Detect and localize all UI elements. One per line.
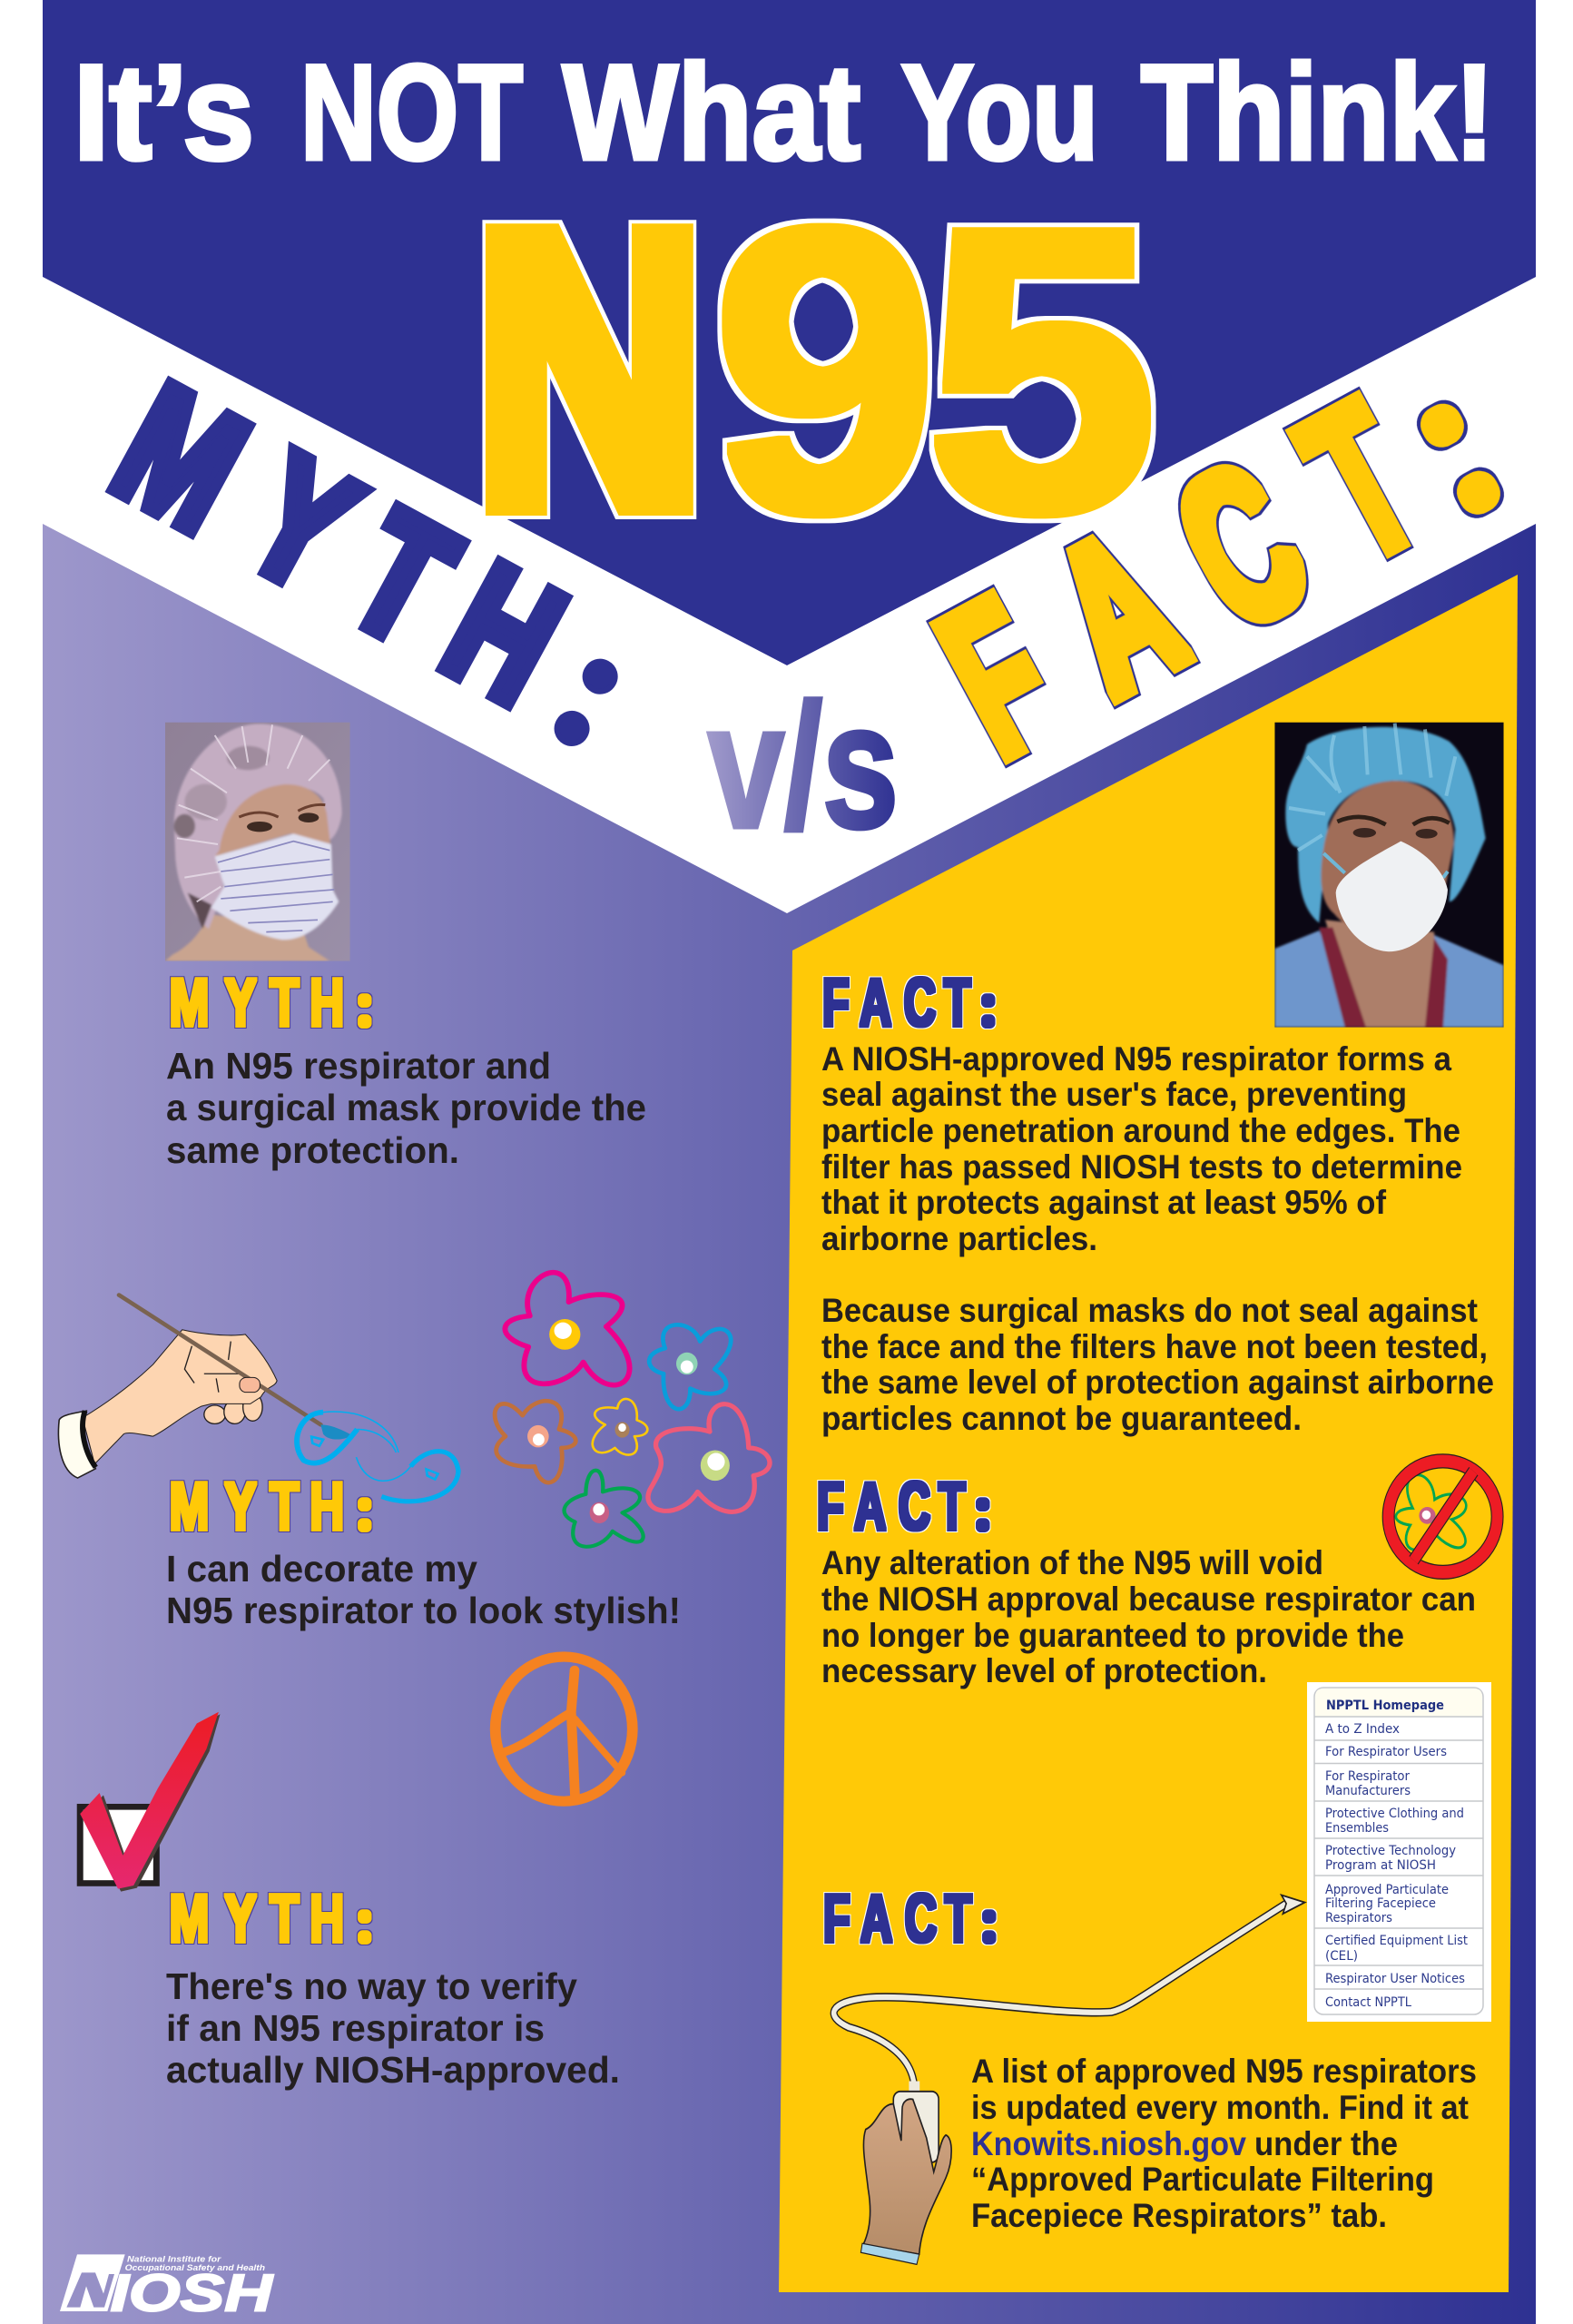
fact text: seal against the user's face, preventing: [821, 1076, 1407, 1113]
web menu screenshot: [1307, 1682, 1491, 2022]
myth text: actually NIOSH-approved.: [166, 2049, 620, 2091]
myth text: I can decorate my: [166, 1548, 477, 1590]
web menu screenshot: For Respirator Users: [1325, 1745, 1447, 1759]
myth text: [166, 1045, 646, 1171]
title: It’s: [74, 36, 254, 188]
logo: NIOSH: National Institute for: [127, 2255, 221, 2264]
panel: fact yellow: [779, 575, 1518, 2292]
myth text: same protection.: [166, 1129, 459, 1171]
heading: N95: 5: [927, 146, 1157, 596]
fact text: under the: [1254, 2125, 1398, 2162]
fact text: filter has passed NIOSH tests to determine: [821, 1148, 1462, 1186]
logo: NIOSH: IOSH: [111, 2264, 274, 2322]
logo: NIOSH: Occupational Safety and Health: [125, 2263, 266, 2272]
fact 1: [821, 966, 1494, 1437]
web menu screenshot: A to Z Index: [1325, 1722, 1400, 1737]
title: [74, 36, 1494, 188]
fact text: the NIOSH approval because respirator can: [821, 1581, 1476, 1618]
title: You: [901, 36, 1098, 188]
myth text: if an N95 respirator is: [166, 2007, 545, 2049]
myth heading: :: [354, 1884, 376, 1956]
myth 2: [166, 1468, 681, 1631]
title: Think!: [1141, 36, 1494, 188]
fact text: Because surgical masks do not seal against: [821, 1292, 1478, 1329]
fact text: the same level of protection against airborne: [821, 1364, 1494, 1401]
title: What: [563, 36, 860, 188]
fact text: [821, 1040, 1494, 1437]
myth 3: [166, 1880, 620, 2091]
title: NOT: [300, 36, 523, 188]
heading: FACT diagonal: FACT: [907, 357, 1452, 802]
fact text: [821, 1544, 1476, 1689]
web menu screenshot: For Respirator: [1325, 1769, 1410, 1784]
icon: prohibited flower: [1389, 1461, 1498, 1572]
myth text: a surgical mask provide the: [166, 1087, 646, 1128]
fact text: A list of approved N95 respirators: [971, 2053, 1477, 2090]
web menu screenshot: (CEL): [1325, 1949, 1358, 1964]
web menu screenshot: Approved Particulate: [1325, 1883, 1449, 1897]
heading: v/s: v/s: [708, 667, 899, 865]
myth text: [166, 1548, 681, 1631]
fact heading: FACT: [823, 1882, 972, 1957]
fact text: A NIOSH-approved N95 respirator forms a: [821, 1040, 1451, 1078]
photo: woman in surgical mask: [165, 723, 350, 961]
white chevron band: [43, 277, 1536, 913]
arrow: mouse cable to menu: [834, 1896, 1304, 2087]
icon: hand with paintbrush and swirl: [58, 1295, 458, 1502]
fact text: Knowits.niosh.gov: [971, 2125, 1246, 2162]
fact 2: [817, 1470, 1476, 1689]
web menu screenshot: Contact NPPTL: [1325, 1995, 1411, 2010]
fact heading: FACT: [822, 966, 971, 1041]
heading: N95: [475, 145, 1157, 596]
icon: peace symbol: [496, 1657, 633, 1801]
heading: MYTH diagonal: :: [521, 581, 672, 790]
myth text: [166, 1965, 620, 2091]
icon: hand on mouse: [860, 2081, 951, 2264]
heading: FACT diagonal: :: [1352, 301, 1547, 571]
fact text: “Approved Particulate Filtering: [971, 2161, 1434, 2198]
heading: MYTH diagonal: MYTH: [88, 349, 590, 740]
myth heading: MYTH: [170, 964, 344, 1040]
fact text: airborne particles.: [821, 1220, 1097, 1257]
fact text: particle penetration around the edges. The: [821, 1112, 1460, 1149]
fact 3: [823, 1882, 1477, 2234]
myth text: An N95 respirator and: [166, 1045, 551, 1087]
web menu screenshot: Respirators: [1325, 1911, 1392, 1925]
web menu screenshot: Filtering Facepiece: [1325, 1896, 1436, 1911]
web menu screenshot: Ensembles: [1325, 1821, 1389, 1836]
fact text: necessary level of protection.: [821, 1652, 1267, 1689]
fact text: Any alteration of the N95 will void: [821, 1544, 1323, 1581]
web menu screenshot: Manufacturers: [1325, 1784, 1411, 1798]
web menu screenshot: Respirator User Notices: [1325, 1972, 1465, 1986]
fact text: the face and the filters have not been tested,: [821, 1328, 1488, 1365]
myth heading: MYTH: [170, 1880, 344, 1956]
fact heading: :: [978, 968, 999, 1040]
web menu screenshot: Program at NIOSH: [1325, 1858, 1436, 1873]
fact text: particles cannot be guaranteed.: [821, 1400, 1302, 1437]
photo: man wearing N95: [1274, 723, 1504, 1028]
fact text: Facepiece Respirators” tab.: [971, 2197, 1387, 2234]
heading: N95: 9: [713, 145, 937, 595]
fact heading: :: [972, 1472, 994, 1544]
fact heading: :: [978, 1884, 1000, 1956]
web menu screenshot: Protective Technology: [1325, 1844, 1456, 1858]
icon: decorative flowers: [495, 1273, 770, 1547]
fact text: is updated every month. Find it at: [971, 2089, 1469, 2126]
icon: checkbox with red check: [80, 1712, 220, 1892]
heading: N95: N: [475, 153, 704, 586]
myth heading: MYTH: [170, 1468, 344, 1544]
myth heading: :: [354, 1472, 376, 1544]
myth text: There's no way to verify: [166, 1965, 577, 2007]
myth 1: [166, 964, 646, 1171]
web menu screenshot: Certified Equipment List: [1325, 1934, 1468, 1948]
fact text: that it protects against at least 95% of: [821, 1184, 1387, 1221]
fact text: [971, 2053, 1477, 2234]
web menu screenshot: Protective Clothing and: [1325, 1807, 1464, 1821]
myth text: N95 respirator to look stylish!: [166, 1590, 681, 1631]
header: blue chevron: [43, 0, 1536, 665]
logo: NIOSH: [60, 2254, 274, 2322]
myth heading: :: [354, 968, 376, 1040]
fact heading: FACT: [817, 1470, 966, 1545]
fact text: no longer be guaranteed to provide the: [821, 1617, 1404, 1654]
web menu screenshot: NPPTL Homepage: [1326, 1699, 1444, 1713]
